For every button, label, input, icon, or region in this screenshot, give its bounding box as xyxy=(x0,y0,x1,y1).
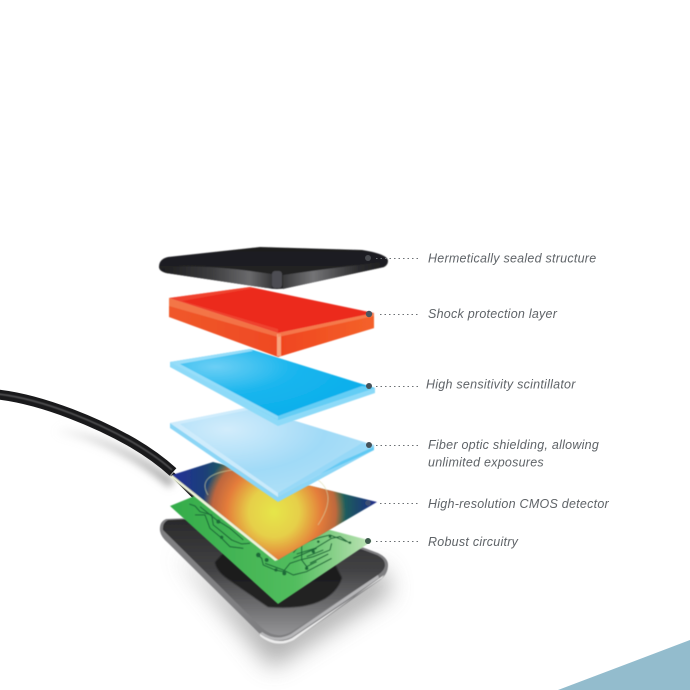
callout: High-resolution CMOS detector: High-resolution CMOS detector xyxy=(428,497,610,511)
callout: Fiber optic shielding: Fiber optic shielding, allowing xyxy=(428,438,599,452)
callout: Shock protection layer xyxy=(366,307,558,321)
exploded sensor infographic xyxy=(0,246,690,690)
callout: Fiber optic shielding xyxy=(366,438,599,470)
fiber optic shielding layer xyxy=(170,407,374,502)
callout: Robust circuitry xyxy=(365,535,519,549)
circuit board layer xyxy=(170,495,372,604)
hermetically sealed top layer xyxy=(159,247,388,289)
callout: High sensitivity scintillator: High sensitivity scintillator xyxy=(426,378,576,392)
callout: Hermetically sealed structure: Hermetically sealed structure xyxy=(428,252,596,266)
cable xyxy=(0,394,196,498)
tray shadow xyxy=(176,552,392,668)
callout: Robust circuitry: Robust circuitry xyxy=(428,535,519,549)
shock protection layer xyxy=(169,287,374,357)
CMOS detector layer xyxy=(170,461,378,562)
callout: Fiber optic shielding: unlimited exposures xyxy=(428,456,544,470)
tray base xyxy=(160,518,388,644)
cable shadow xyxy=(55,430,172,484)
teal corner shape xyxy=(558,640,690,690)
callout: Shock protection layer: Shock protection layer xyxy=(428,307,558,321)
scintillator layer xyxy=(170,349,375,426)
